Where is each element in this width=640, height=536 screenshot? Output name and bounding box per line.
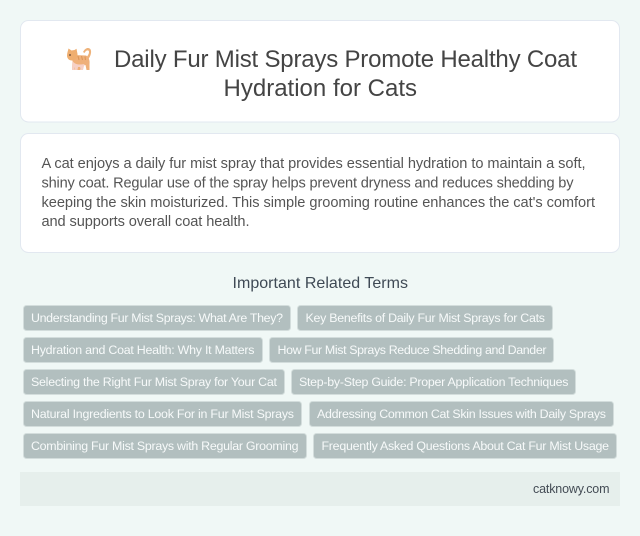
tag [310, 402, 614, 426]
tag: Selecting the Right Fur Mist Spray for Your Cat [31, 375, 278, 389]
tag [270, 338, 554, 362]
text block: description: A cat enjoys a daily fur mist spray that provides essential hydration to maintain a soft, [42, 156, 586, 172]
tag: Natural Ingredients to Look For in Fur Mist Sprays [31, 407, 294, 421]
panel: description [20, 134, 620, 252]
tag: Understanding Fur Mist Sprays: What Are They? [31, 311, 283, 325]
tag: Combining Fur Mist Sprays with Regular Grooming [31, 439, 299, 453]
tag: How Fur Mist Sprays Reduce Shedding and Dander [278, 343, 546, 357]
tag: Addressing Common Cat Skin Issues with Daily Sprays [317, 407, 606, 421]
panel: related terms tags [24, 306, 616, 458]
tag: Hydration and Coat Health: Why It Matters [31, 343, 254, 357]
tag [24, 370, 284, 394]
text block: description: and supports overall coat health. [42, 214, 250, 230]
tag: Key Benefits of Daily Fur Mist Sprays for Cats [306, 311, 545, 325]
footer text: catknowy.com [533, 482, 610, 496]
title: Hydration for Cats [224, 75, 417, 102]
text block: description [42, 156, 595, 230]
footer [20, 472, 620, 506]
tag [24, 338, 262, 362]
tag [24, 306, 290, 330]
tag [314, 434, 616, 458]
tag [298, 306, 552, 330]
tag [292, 370, 576, 394]
tag [24, 434, 306, 458]
tag: Frequently Asked Questions About Cat Fur Mist Usage [322, 439, 609, 453]
tag [24, 402, 302, 426]
icon: cat [67, 48, 91, 70]
text block: description: shiny coat. Regular use of the spray helps prevent dryness and reduces shedding by [42, 176, 574, 192]
panel: title card [20, 20, 620, 122]
title: Daily Fur Mist Sprays Promote Healthy Coat [114, 46, 577, 73]
tag: Step-by-Step Guide: Proper Application Techniques [299, 375, 568, 389]
title [114, 46, 577, 102]
text block: description: keeping the skin moisturized. This simple grooming routine enhances the cat's comfort [42, 195, 595, 211]
heading: related terms: Important Related Terms [232, 275, 408, 292]
